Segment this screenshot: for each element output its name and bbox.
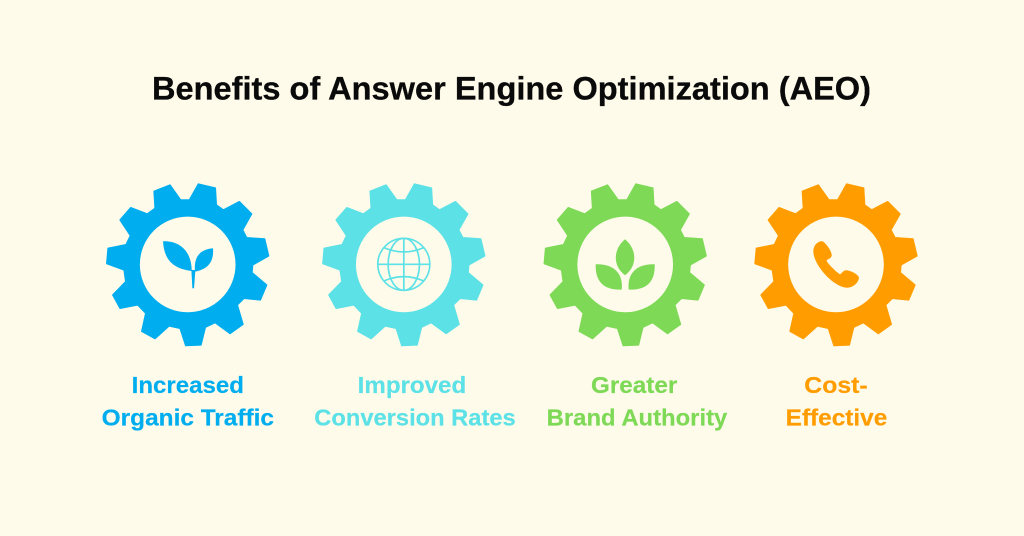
label: Greater: [591, 372, 677, 398]
panel: improved conversion rates: [314, 184, 516, 431]
panel: improved conversion rates: Conversion Rates: [314, 405, 516, 431]
title: Benefits of Answer Engine Optimization (AEO): [152, 70, 871, 106]
label: Cost-: [804, 372, 868, 398]
label: Improved: [358, 372, 466, 398]
label: Increased: [132, 372, 244, 398]
gear icon with sprout: [107, 184, 269, 346]
panel: greater brand authority: Brand Authority: [547, 405, 727, 431]
panel: increased organic traffic: Organic Traffic: [102, 405, 274, 431]
panel: increased organic traffic: [102, 184, 274, 431]
gear icon with leaves: [544, 184, 706, 346]
panel: greater brand authority: [544, 184, 727, 431]
gear icon with phone: [755, 184, 917, 346]
gear icon with globe: [323, 184, 485, 346]
panel: cost-effective: [755, 184, 917, 431]
panel: cost-effective: Effective: [786, 405, 887, 431]
